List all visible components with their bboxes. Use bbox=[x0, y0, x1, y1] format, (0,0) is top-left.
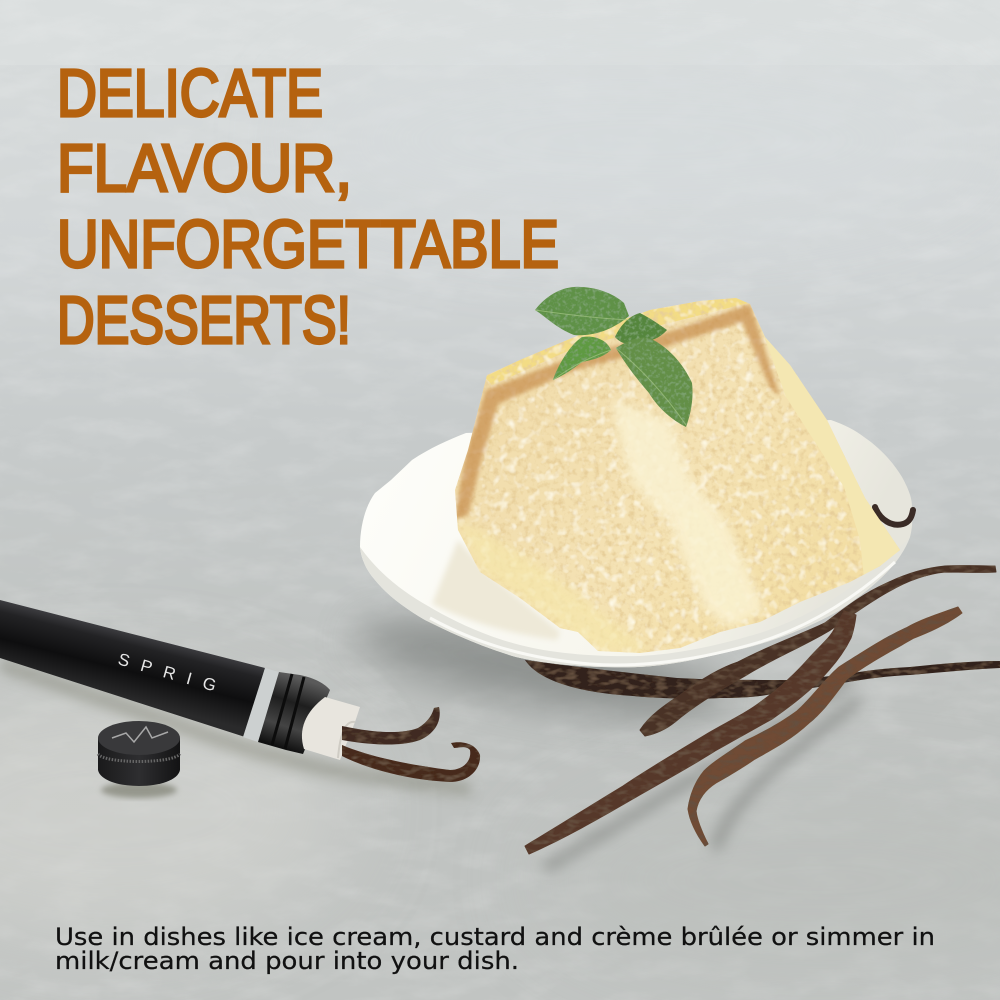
crust bbox=[454, 304, 780, 520]
title: DELICATE bbox=[57, 56, 323, 131]
plate cake shadow bbox=[432, 540, 560, 640]
title: UNFORGETTABLE bbox=[57, 207, 559, 282]
bean shadows bbox=[545, 680, 860, 868]
bean in tube: lower bbox=[342, 742, 480, 782]
bean: long front bbox=[688, 607, 962, 846]
thin vanilla bean bbox=[640, 566, 996, 736]
mint leaf: large right bbox=[616, 337, 693, 427]
silver ring bbox=[243, 668, 279, 742]
caption text bbox=[55, 923, 935, 975]
cream side bbox=[764, 337, 900, 574]
plate bbox=[360, 420, 912, 667]
paper roll bbox=[302, 697, 360, 760]
cap top bbox=[98, 721, 180, 755]
mint leaf: top left bbox=[535, 287, 629, 335]
threaded neck bbox=[258, 672, 330, 754]
cap shadow bbox=[101, 782, 177, 798]
cake sponge bbox=[455, 298, 900, 653]
vanilla beans: right bundle bbox=[525, 607, 962, 868]
title: FLAVOUR, bbox=[57, 131, 352, 206]
caption text: Use in dishes like ice cream, custard and crème brûlée or simmer in bbox=[55, 923, 935, 951]
brand text: SPRIG bbox=[116, 650, 218, 695]
small bean behind plate edge bbox=[875, 507, 913, 525]
tube body bbox=[0, 600, 265, 737]
bean in tube: upper bbox=[342, 707, 440, 745]
tube shadow bbox=[0, 664, 470, 790]
cap body bbox=[98, 738, 180, 786]
cake details bbox=[454, 296, 902, 652]
cream filling bbox=[611, 400, 765, 628]
mint leaf: back bbox=[615, 313, 667, 344]
cake lower edge bbox=[462, 528, 642, 652]
mint leaf: small centre bbox=[553, 337, 611, 380]
vanilla bean under plate bbox=[525, 660, 1000, 699]
SPRIG tube bbox=[0, 600, 480, 790]
tube cap bbox=[98, 721, 180, 798]
frosting top bbox=[485, 296, 748, 385]
title: DESSERTS! bbox=[57, 283, 351, 358]
cake slice bbox=[454, 296, 902, 653]
title bbox=[57, 56, 559, 358]
shadow under plate bbox=[347, 600, 733, 736]
mint sprig bbox=[535, 287, 693, 427]
caption text: milk/cream and pour into your dish. bbox=[55, 947, 519, 975]
plate rim bbox=[360, 537, 910, 667]
bean: long lower bbox=[525, 611, 856, 854]
